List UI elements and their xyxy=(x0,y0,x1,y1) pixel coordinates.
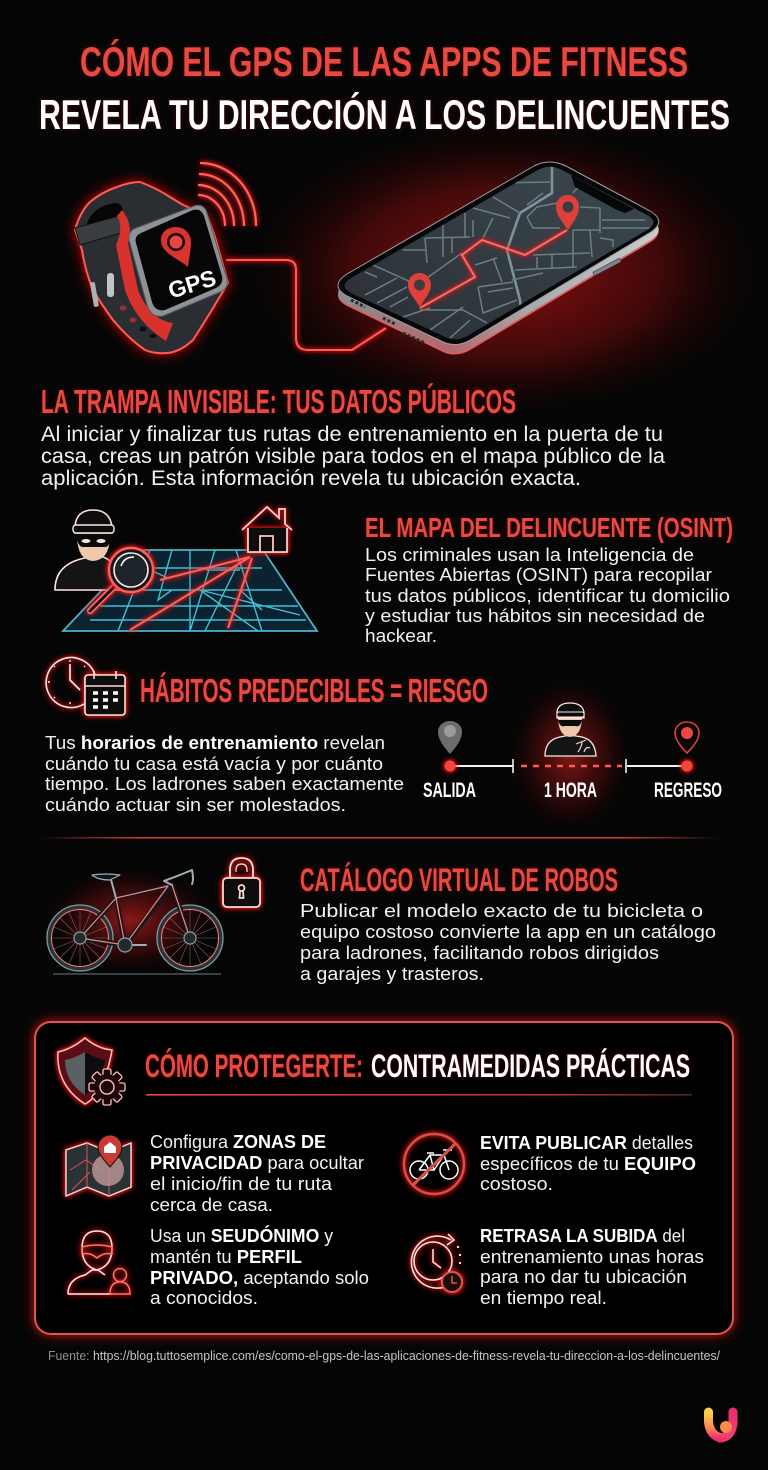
text: evita publicar xyxy=(480,1132,696,1194)
watch location pin xyxy=(161,227,191,267)
text: el mapa del delincuente: hackear. xyxy=(365,625,437,646)
illustration: connector cable xyxy=(226,260,386,350)
text: hábitos predecibles: tiempo. Los ladrones saben exactamente xyxy=(45,773,404,794)
timeline labels: SALIDA xyxy=(423,779,476,802)
text: zonas de privacidad: cerca de casa. xyxy=(150,1194,273,1215)
text: zonas de privacidad: el inicio/fin de tu ruta xyxy=(150,1173,333,1194)
icon: signal waves xyxy=(198,163,256,226)
text: seudónimo: a conocidos. xyxy=(150,1287,258,1308)
text: evita publicar: costoso. xyxy=(480,1173,553,1194)
text: evita publicar: EVITA PUBLICAR detalles xyxy=(480,1132,693,1153)
illustration: criminal map with house xyxy=(55,507,317,631)
text: el mapa del delincuente xyxy=(365,544,730,646)
icon: clock and calendar xyxy=(46,658,125,715)
text: la trampa invisible: Al iniciar y finalizar tus rutas de entrenamiento en la puerta de tu xyxy=(41,423,663,446)
text: seudónimo: Usa un SEUDÓNIMO y xyxy=(150,1225,334,1246)
icon: house xyxy=(242,507,292,552)
text: retrasa la subida: entrenamiento unas horas xyxy=(480,1246,704,1267)
icon: no bike xyxy=(404,1134,464,1194)
phone pin: start xyxy=(408,273,431,307)
text: seudónimo: mantén tu PERFIL xyxy=(150,1246,302,1267)
icon: brand logo xyxy=(708,1412,733,1438)
timeline labels: REGRESO xyxy=(654,779,722,802)
icon: privacy map xyxy=(66,1135,131,1196)
text: el mapa del delincuente: y estudiar tus hábitos sin necesidad de xyxy=(365,605,705,626)
icon: grey departure pin xyxy=(438,721,462,754)
text: catálogo virtual de robos: para ladrones, facilitando robos dirigidos xyxy=(300,942,659,963)
hero glow xyxy=(250,125,760,415)
phone pin: end xyxy=(556,195,579,230)
text: el mapa del delincuente: Los criminales usan la Inteligencia de xyxy=(365,544,694,565)
text: la trampa invisible: aplicación. Esta información revela tu ubicación exacta. xyxy=(41,467,581,490)
text: la trampa invisible: casa, creas un patrón visible para todos en el mapa público de la xyxy=(41,445,665,468)
watch GPS label: GPS xyxy=(165,264,219,304)
title xyxy=(39,37,730,138)
illustration: smartphone with map xyxy=(338,160,659,355)
icon: thief xyxy=(545,703,596,756)
text: catálogo virtual de robos: a garajes y trasteros. xyxy=(300,963,484,984)
panel heading: CÓMO PROTEGERTE: xyxy=(145,1048,363,1084)
text: hábitos predecibles: cuándo actuar sin ser molestados. xyxy=(45,794,346,815)
text: la trampa invisible xyxy=(41,423,665,490)
timeline labels: 1 HORA xyxy=(544,779,597,802)
text: retrasa la subida: en tiempo real. xyxy=(480,1287,607,1308)
text: seudónimo xyxy=(150,1225,369,1308)
text: retrasa la subida: RETRASA LA SUBIDA del xyxy=(480,1225,685,1246)
panel: contramedidas prácticas xyxy=(35,1022,733,1334)
text: catálogo virtual de robos: equipo costoso convierte la app en un catálogo xyxy=(300,921,716,942)
text: zonas de privacidad xyxy=(150,1131,364,1215)
icon: padlock xyxy=(223,858,260,907)
text: retrasa la subida: para no dar tu ubicación xyxy=(480,1266,687,1287)
text: catálogo virtual de robos xyxy=(300,900,716,984)
text: hábitos predecibles: cuándo tu casa está vacía y por cuánto xyxy=(45,753,383,774)
icon: shield with gear xyxy=(58,1038,125,1105)
timeline labels xyxy=(423,779,722,802)
panel heading xyxy=(145,1048,690,1084)
text: zonas de privacidad: Configura ZONAS DE xyxy=(150,1131,326,1152)
text: hábitos predecibles: Tus horarios de entrenamiento revelan xyxy=(45,732,385,753)
illustration: road bike xyxy=(42,866,223,975)
timeline: one hour absence xyxy=(423,677,722,833)
text: catálogo virtual de robos: Publicar el modelo exacto de tu bicicleta o xyxy=(300,900,703,921)
icon: masked user xyxy=(68,1231,130,1294)
text: hábitos predecibles xyxy=(45,732,404,815)
text: retrasa la subida xyxy=(480,1225,704,1308)
heading: la trampa invisible: LA TRAMPA INVISIBLE: TUS DATOS PÚBLICOS xyxy=(41,383,516,420)
illustration: smartwatch with GPS xyxy=(75,182,228,353)
text: seudónimo: PRIVADO, aceptando solo xyxy=(150,1267,369,1288)
icon: red return pin xyxy=(675,722,699,753)
text: zonas de privacidad: PRIVACIDAD para ocultar xyxy=(150,1152,364,1173)
heading: hábitos predecibles: HÁBITOS PREDECIBLES = RIESGO xyxy=(140,672,488,709)
text: el mapa del delincuente: tus datos públicos, identificar tu domicilio xyxy=(365,585,730,606)
icon: delayed clock xyxy=(411,1234,462,1292)
text: evita publicar: específicos de tu EQUIPO xyxy=(480,1153,696,1174)
text: el mapa del delincuente: Fuentes Abiertas (OSINT) para recopilar xyxy=(365,564,712,585)
source footer: Fuente: https://blog.tuttosemplice.com/es/como-el-gps-de-las-aplicaciones-de-fitness-revela-tu-direccion-a-los-delincuentes/ xyxy=(48,1348,720,1363)
icon: thief with magnifier xyxy=(55,510,153,611)
